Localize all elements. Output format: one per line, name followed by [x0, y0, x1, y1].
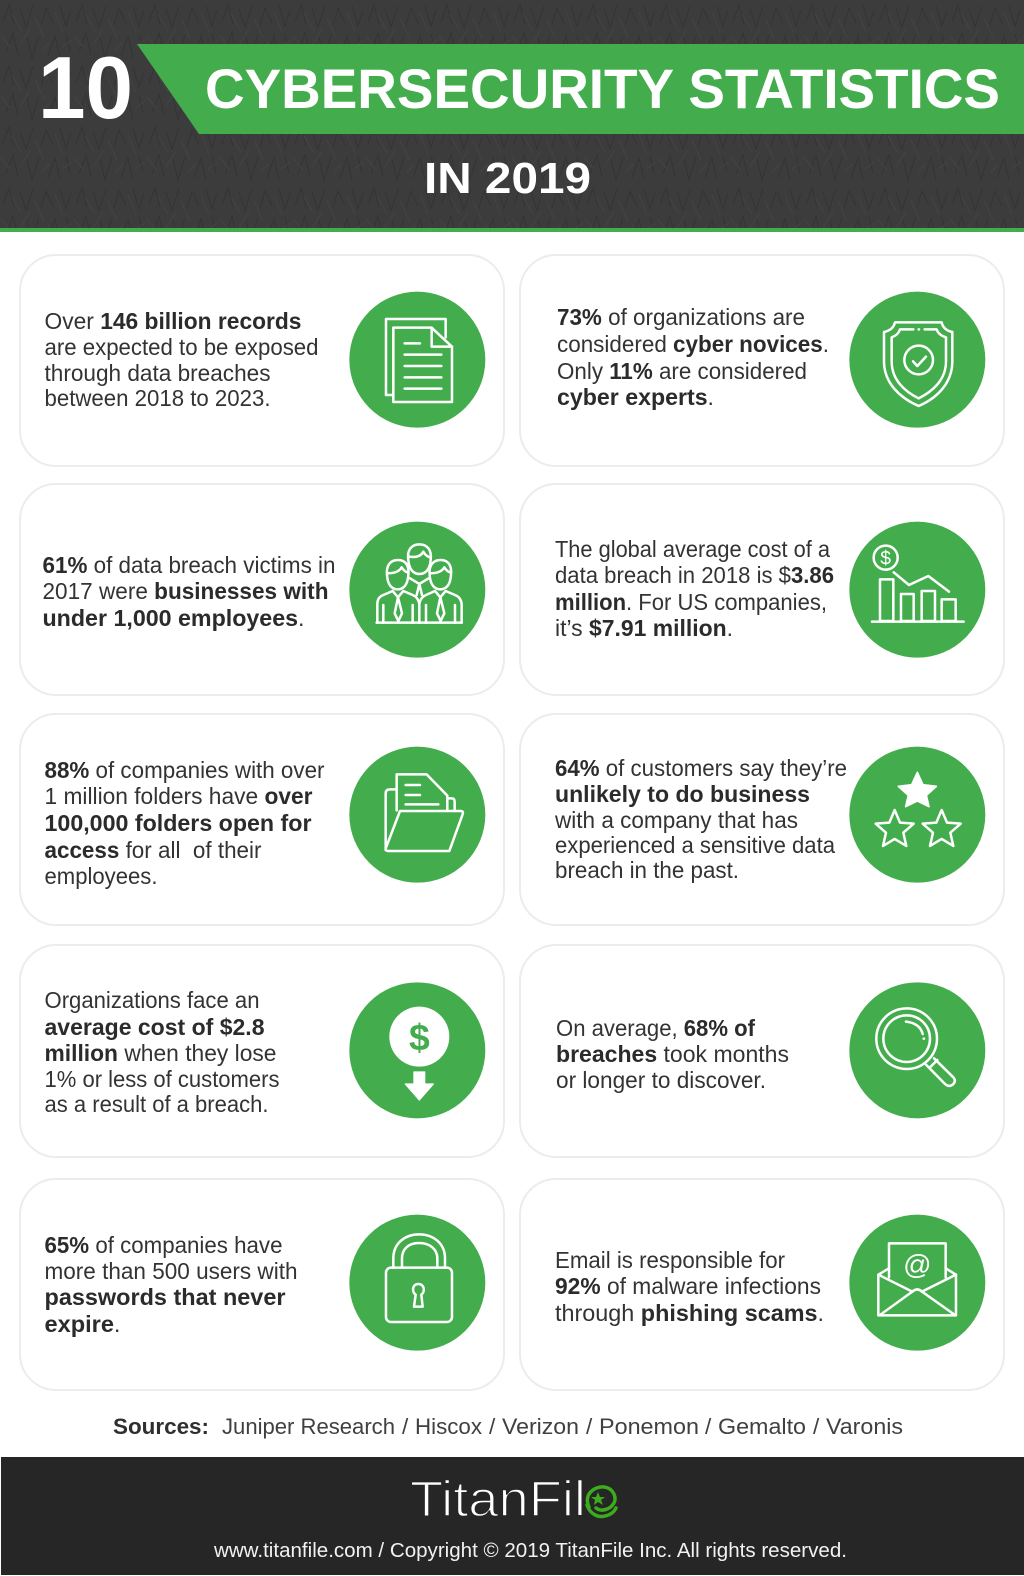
title: CYBERSECURITY STATISTICS	[205, 57, 1000, 120]
panel: records exposed	[20, 255, 504, 466]
text: cost of lost customers	[44, 987, 280, 1117]
subtitle: IN 2019	[424, 154, 591, 203]
copyright: www.titanfile.com / Copyright © 2019 TitanFile Inc. All rights reserved.	[213, 1539, 847, 1562]
text: cost of breach: million. For US companies,	[555, 589, 827, 615]
text: passwords: passwords that never	[44, 1284, 286, 1310]
text: cost of lost customers: million when they lose	[44, 1040, 276, 1066]
text: phishing email: Email is responsible for	[555, 1247, 785, 1273]
sources: /	[813, 1414, 820, 1439]
sources: Varonis	[826, 1414, 903, 1439]
panel: open folders	[20, 714, 504, 925]
panel: cost of lost customers	[20, 945, 504, 1157]
green title banner	[137, 44, 1024, 134]
sources: Ponemon	[599, 1414, 699, 1439]
text: passwords: 65% of companies have	[44, 1232, 282, 1258]
text: records exposed	[44, 308, 318, 411]
text: cyber novices: Only 11% are considered	[557, 358, 807, 384]
text: passwords	[44, 1232, 298, 1337]
text: time to discover: breaches took months	[556, 1041, 789, 1067]
text: open folders	[44, 757, 325, 889]
text: cyber novices: 73% of organizations are	[557, 304, 805, 330]
sources: /	[705, 1414, 712, 1439]
text: time to discover	[556, 1015, 789, 1093]
sources: Verizon	[502, 1414, 579, 1439]
text: records exposed: are expected to be exposed	[44, 334, 318, 360]
text: records exposed: through data breaches	[44, 360, 270, 386]
icon: documents	[349, 292, 485, 428]
text: cost of lost customers: as a result of a breach.	[44, 1091, 268, 1117]
text: cyber novices	[557, 304, 829, 410]
panel: small business victims	[20, 484, 504, 695]
panel: cost of breach	[520, 484, 1004, 695]
text: small business victims	[42, 552, 336, 631]
text: open folders: 88% of companies with over	[44, 757, 325, 783]
text: open folders: 1 million folders have over	[44, 783, 313, 809]
text: phishing email	[555, 1247, 824, 1326]
panel: cyber novices	[520, 255, 1004, 466]
text: cost of lost customers: 1% or less of customers	[44, 1066, 280, 1092]
sources: Juniper Research	[222, 1414, 395, 1439]
sources: /	[489, 1414, 496, 1439]
sources: Hiscox	[415, 1414, 483, 1439]
icon: magnifying glass	[849, 982, 985, 1118]
text: passwords: more than 500 users with	[44, 1258, 298, 1284]
icon: dollar with down arrow	[349, 982, 485, 1118]
text: time to discover: or longer to discover.	[556, 1067, 766, 1093]
icon: folder	[349, 747, 485, 883]
text: customer trust	[554, 755, 847, 883]
sources: /	[402, 1414, 409, 1439]
title number: 10	[38, 38, 133, 137]
text: phishing email: 92% of malware infections	[555, 1273, 821, 1299]
text: customer trust: breach in the past.	[555, 857, 739, 883]
text: cost of lost customers: Organizations face an	[44, 987, 260, 1013]
icon: employees	[349, 522, 485, 658]
panel: phishing email	[520, 1179, 1004, 1390]
icon: shield	[849, 292, 985, 428]
icon: dollar with down arrow: $	[409, 1016, 430, 1058]
sources: Sources:	[113, 1414, 209, 1439]
text: customer trust: with a company that has	[554, 807, 798, 833]
text: phishing email: through phishing scams.	[555, 1300, 824, 1326]
text: cost of lost customers: average cost of $2.8	[44, 1014, 265, 1040]
panel: passwords	[20, 1179, 504, 1390]
text: customer trust: experienced a sensitive data	[555, 832, 835, 858]
text: small business victims: under 1,000 employees.	[42, 605, 304, 631]
icon: falling bar chart: $	[880, 548, 891, 569]
text: passwords: expire.	[44, 1311, 120, 1337]
text: cost of breach	[555, 536, 834, 641]
text: time to discover: On average, 68% of	[556, 1015, 755, 1041]
icon: falling bar chart	[849, 522, 985, 658]
text: records exposed: Over 146 billion records	[44, 308, 302, 334]
text: cost of breach: it’s $7.91 million.	[555, 615, 733, 641]
sources: Gemalto	[718, 1414, 806, 1439]
text: cyber novices: cyber experts.	[557, 384, 714, 410]
sources	[113, 1414, 903, 1439]
panel: customer trust	[520, 714, 1004, 925]
sources: /	[586, 1414, 593, 1439]
text: small business victims: 2017 were businesses with	[42, 578, 328, 604]
text: records exposed: between 2018 to 2023.	[44, 385, 270, 411]
header	[0, 0, 1024, 232]
text: small business victims: 61% of data breach victims in	[42, 552, 336, 578]
icon: open envelope	[849, 1215, 985, 1351]
text: cyber novices: considered cyber novices.	[557, 331, 829, 357]
icon: stars	[849, 747, 985, 883]
text: open folders: access for all of their	[44, 837, 262, 863]
text: customer trust: 64% of customers say they’re	[555, 755, 847, 781]
icon: open envelope: @	[903, 1249, 932, 1280]
text: cost of breach: The global average cost of a	[555, 536, 830, 562]
text: cost of breach: data breach in 2018 is $3.86	[555, 562, 834, 588]
text: open folders: employees.	[44, 863, 158, 889]
icon: padlock	[349, 1215, 485, 1351]
text: open folders: 100,000 folders open for	[44, 810, 312, 836]
footer	[1, 1457, 1024, 1575]
panel: time to discover	[520, 945, 1004, 1157]
text: customer trust: unlikely to do business	[555, 781, 810, 807]
logo: TitanFile: TitanFil	[410, 1471, 586, 1527]
